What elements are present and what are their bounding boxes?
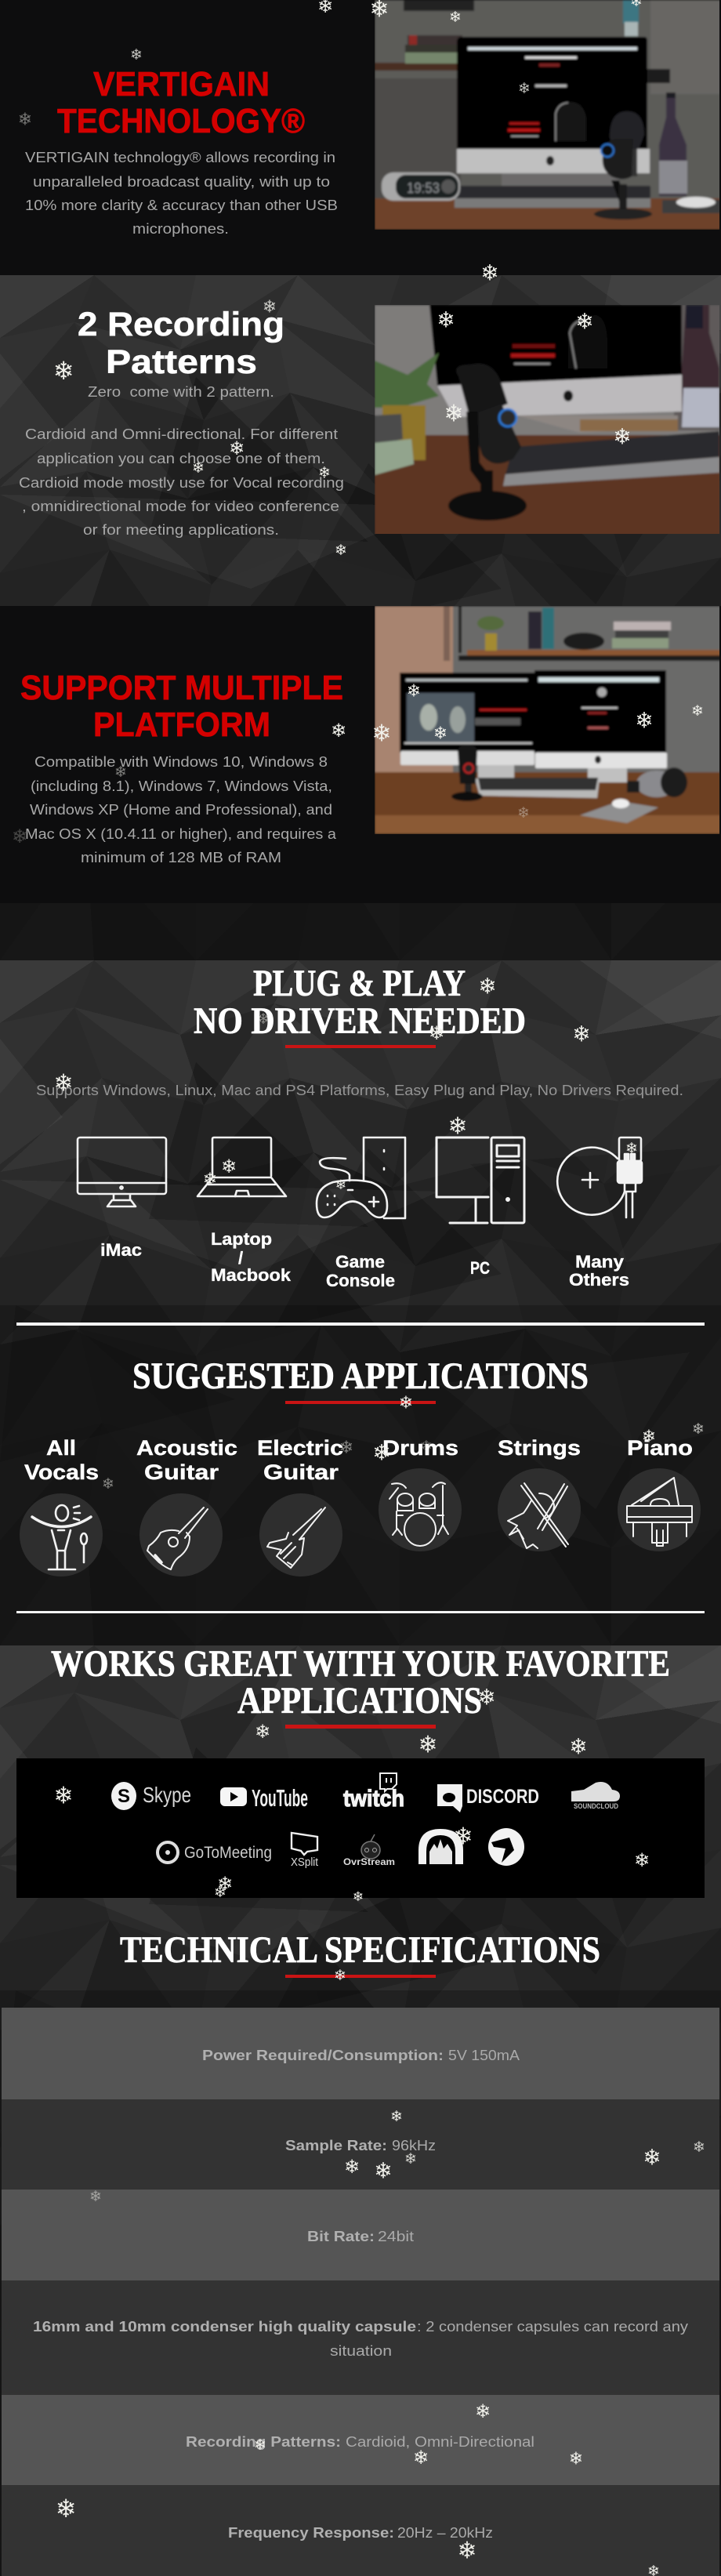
heading: vertigain technology: TECHNOLOGY® [57,102,305,140]
falling snowflakes overlay: ❄ [353,1889,364,1905]
panel: suggested applications [20,1355,701,1576]
falling snowflakes overlay: ❄ [643,2145,661,2170]
label: many others [569,1252,629,1290]
panel: plug and play [36,963,683,1290]
falling snowflakes overlay: ❄ [477,1684,496,1711]
falling snowflakes overlay: ❄ [221,1156,237,1177]
falling snowflakes overlay: ❄ [344,2156,360,2178]
application: acoustic guitar [136,1436,237,1576]
spec row: frequency response: Frequency Response: [228,2525,394,2541]
spec row: bit rate: 24bit [378,2229,414,2244]
application: electric guitar [257,1436,343,1576]
falling snowflakes overlay: ❄ [257,1010,270,1028]
falling snowflakes overlay: ❄ [255,1721,270,1743]
text block: vertigain description: 10% more clarity & accuracy than other USB [25,198,338,213]
text block: compatibility description: Windows XP (Home and Professional), and [30,802,332,818]
text block: recording pattern description: Cardioid mode mostly use for Vocal recording [19,475,344,491]
application: all vocals: All [46,1436,76,1460]
falling snowflakes overlay: ❄ [517,804,530,822]
panel: vertigain technology [25,0,719,237]
icon: imac [78,1137,166,1206]
application: drums [379,1436,462,1551]
photo: microphone in front of desktop monitor [375,0,721,230]
falling snowflakes overlay: ❄ [53,1069,74,1098]
falling snowflakes overlay: ❄ [372,1439,391,1466]
red underline [285,1725,436,1729]
falling snowflakes overlay: ❄ [691,702,704,720]
logo: discord: DISCORD [466,1786,539,1808]
application: strings [498,1436,581,1551]
application: electric guitar: Electric [257,1436,343,1460]
label: game console: Game [335,1252,385,1272]
divider line [16,1322,705,1326]
text block: compatibility description: minimum of 128 MB of RAM [81,850,281,865]
text block: recording pattern description: Zero come with 2 pattern. [88,384,274,400]
application: strings: Strings [498,1436,581,1460]
falling snowflakes overlay: ❄ [634,1849,650,1871]
falling snowflakes overlay: ❄ [457,2537,477,2565]
logo: xsplit: XSplit [291,1856,319,1869]
heading: technical specifications: TECHNICAL SPECIFICATIONS [120,1929,600,1971]
icon: game console [317,1137,405,1218]
falling snowflakes overlay: ❄ [331,720,346,742]
logo: last app mark [488,1828,524,1866]
logo: headphones [418,1829,463,1864]
logo: soundcloud [571,1782,620,1810]
logo: youtube [220,1784,308,1812]
falling snowflakes overlay: ❄ [413,2447,429,2469]
falling snowflakes overlay: ❄ [56,2494,76,2523]
falling snowflakes overlay: ❄ [518,80,531,97]
application: drums: Drums [382,1436,458,1460]
text block: compatibility description: Mac OS X (10.4.11 or higher), and requires a [25,826,337,842]
falling snowflakes overlay: ❄ [625,1140,638,1157]
falling snowflakes overlay: ❄ [18,110,32,130]
application: all vocals [20,1436,103,1576]
text block: supported platforms: Supports Windows, Linux, Mac and PS4 Platforms, Easy Plug and Play, No Drivers Required. [36,1083,683,1098]
application: all vocals: Vocals [24,1460,99,1484]
falling snowflakes overlay: ❄ [407,682,421,701]
label: imac: iMac [100,1240,142,1260]
application: acoustic guitar: Guitar [144,1460,219,1484]
logo: skype [111,1782,191,1810]
spec row: capsule [2,2280,719,2395]
photo: microphone in front of desktop monitor: 19:53 [407,180,440,196]
falling snowflakes overlay: ❄ [334,1967,346,1984]
text block: vertigain description: unparalleled broadcast quality, with up to [33,174,330,190]
spec row: frequency response [2,2485,719,2576]
falling snowflakes overlay: ❄ [254,2436,266,2454]
label: pc: PC [470,1258,490,1278]
heading: support multiple platform [20,669,343,744]
spec row: power: Power Required/Consumption: [202,2048,444,2063]
panel: technical specifications [2,1929,719,2576]
falling snowflakes overlay: ❄ [53,1783,74,1809]
falling snowflakes overlay: ❄ [102,1475,114,1493]
text block: recording pattern description: , omnidirectional mode for video conference [22,499,339,514]
falling snowflakes overlay: ❄ [335,542,347,559]
falling snowflakes overlay: ❄ [475,2400,491,2422]
text block: vertigain description [25,150,338,237]
text block: recording pattern description [19,384,344,538]
panel: 2 recording patterns [19,305,721,538]
spec row: sample rate: 96kHz [392,2138,436,2153]
falling snowflakes overlay: ❄ [693,2139,705,2156]
falling snowflakes overlay: ❄ [437,307,455,332]
falling snowflakes overlay: ❄ [642,1427,656,1447]
logo: soundcloud: SOUNDCLOUD [574,1802,618,1810]
falling snowflakes overlay: ❄ [214,1884,226,1901]
label: many others: Many [575,1252,625,1272]
logo: discord [437,1784,539,1812]
falling snowflakes overlay: ❄ [449,9,462,26]
falling snowflakes overlay: ❄ [569,2449,583,2469]
red underline [285,1045,436,1048]
text block: compatibility description: (including 8.1), Windows 7, Windows Vista, [31,778,332,794]
falling snowflakes overlay: ❄ [433,724,447,743]
red underline [285,1975,436,1978]
falling snowflakes overlay: ❄ [569,1734,588,1759]
falling snowflakes overlay: ❄ [371,720,392,748]
falling snowflakes overlay: ❄ [418,1731,438,1759]
text block: recording pattern description: or for meeting applications. [83,522,279,538]
spec row: power [2,2008,719,2099]
logo: skype: S [118,1786,130,1807]
label: laptop / macbook: Laptop [211,1229,272,1249]
label: game console: Console [326,1271,395,1290]
text block: compatibility description: Compatible with Windows 10, Windows 8 [34,754,328,770]
falling snowflakes overlay: ❄ [575,309,594,334]
spec row: sample rate [2,2099,719,2190]
falling snowflakes overlay: ❄ [89,2188,102,2205]
application: piano [618,1436,701,1551]
text block: recording pattern description: Cardioid and Omni-directional. For different [25,426,338,442]
label: game console [326,1252,395,1290]
heading: 2 recording patterns [78,306,284,381]
panel: favorite applications [16,1643,705,1898]
logo: youtube: YouTube [252,1784,308,1812]
application: electric guitar: Guitar [263,1460,339,1484]
spec row: capsule: : 2 condenser capsules can record any [417,2319,688,2335]
spec row: bit rate: Bit Rate: [307,2229,375,2244]
falling snowflakes overlay: ❄ [374,2157,393,2184]
falling snowflakes overlay: ❄ [53,356,74,386]
falling snowflakes overlay: ❄ [399,1394,413,1413]
label: laptop / macbook [211,1229,292,1285]
logo: xsplit [291,1833,319,1869]
heading: vertigain technology: VERTIGAIN [93,65,270,103]
icon: pc [437,1137,524,1223]
heading: 2 recording patterns: 2 Recording [78,306,284,343]
icon: laptop [197,1137,286,1196]
logo: gotomeeting: GoToMeeting [184,1844,272,1862]
logo: ovrstream [343,1834,395,1867]
logo: gotomeeting [158,1842,272,1863]
falling snowflakes overlay: ❄ [478,974,497,999]
falling snowflakes overlay: ❄ [130,46,143,63]
heading: support multiple platform: SUPPORT MULTIPLE [20,669,343,707]
spec row: recording patterns: Cardioid, Omni-Directional [346,2434,534,2450]
falling snowflakes overlay: ❄ [318,464,331,481]
falling snowflakes overlay: ❄ [339,1438,353,1458]
spec row: frequency response: 20Hz – 20kHz [397,2525,493,2541]
spec row: recording patterns: Recording Patterns: [186,2434,341,2450]
falling snowflakes overlay: ❄ [692,1420,705,1438]
heading: plug and play no driver needed [194,963,526,1042]
falling snowflakes overlay: ❄ [447,1113,468,1140]
falling snowflakes overlay: ❄ [217,1873,233,1895]
application: piano: Piano [627,1436,693,1460]
logo: twitch [343,1773,404,1812]
falling snowflakes overlay: ❄ [114,764,127,781]
spec row: capsule: situation [330,2343,392,2359]
falling snowflakes overlay: ❄ [229,437,245,459]
panel: support multiple platform [0,606,721,903]
falling snowflakes overlay: ❄ [203,1170,217,1190]
red underline [285,1401,436,1404]
photo: microphone close-up on desk [375,305,721,537]
text block: recording pattern description: application you can choose one of them. [37,451,325,466]
heading: support multiple platform: PLATFORM [93,706,270,744]
heading: works great with your favorite applications [51,1643,670,1722]
icon: many others usb [557,1137,642,1217]
logo: twitch: twitch [343,1786,404,1812]
falling snowflakes overlay: ❄ [12,825,27,847]
falling snowflakes overlay: ❄ [420,1438,433,1455]
label: many others: Others [569,1270,629,1290]
falling snowflakes overlay: ❄ [444,400,464,428]
logo: ovrstream: OvrStream [343,1856,395,1867]
falling snowflakes overlay: ❄ [263,298,277,317]
falling snowflakes overlay: ❄ [480,260,499,285]
photo: two monitors with microphone [375,606,721,834]
application: acoustic guitar: Acoustic [136,1436,237,1460]
label: laptop / macbook: / [238,1248,243,1268]
heading: works great with your favorite applications: APPLICATIONS [237,1680,482,1722]
heading: plug and play no driver needed: NO DRIVER NEEDED [194,1000,526,1042]
falling snowflakes overlay: ❄ [572,1021,591,1047]
text block: vertigain description: VERTIGAIN technology® allows recording in [25,150,335,165]
logo strip [16,1758,705,1898]
falling snowflakes overlay: ❄ [335,1177,346,1193]
text block: compatibility description [25,754,337,865]
label: laptop / macbook: Macbook [211,1265,292,1285]
heading: suggested applications: SUGGESTED APPLICATIONS [132,1355,589,1397]
divider line [16,1611,705,1613]
logo: skype: Skype [143,1783,191,1807]
falling snowflakes overlay: ❄ [453,1823,473,1850]
falling snowflakes overlay: ❄ [429,1022,444,1044]
spec row: capsule: 16mm and 10mm condenser high quality capsule [33,2319,416,2335]
spec row: recording patterns [2,2395,719,2485]
falling snowflakes overlay: ❄ [404,2150,417,2168]
text block: vertigain description: microphones. [132,221,229,237]
falling snowflakes overlay: ❄ [192,459,205,477]
heading: vertigain technology [57,65,305,140]
heading: 2 recording patterns: Patterns [106,343,257,381]
spec row: power: 5V 150mA [448,2048,520,2063]
spec row: bit rate [2,2190,719,2280]
falling snowflakes overlay: ❄ [613,423,632,450]
spec row: sample rate: Sample Rate: [285,2138,387,2153]
falling snowflakes overlay: ❄ [390,2108,403,2125]
heading: plug and play no driver needed: PLUG & PLAY [253,963,466,1004]
falling snowflakes overlay: ❄ [635,707,654,734]
